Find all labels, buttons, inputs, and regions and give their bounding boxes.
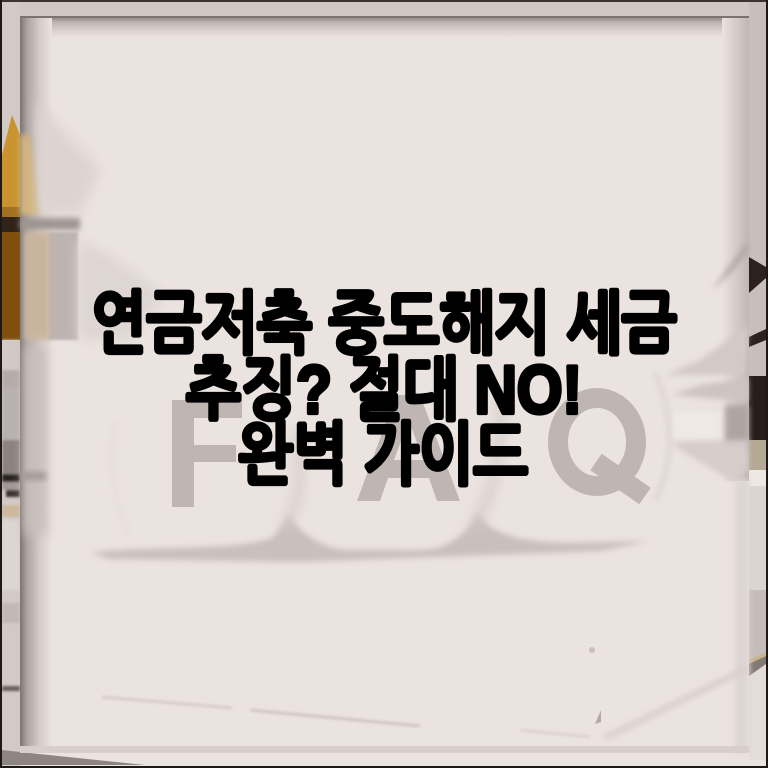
letter F [172,400,242,507]
right strip: dark object [749,257,766,676]
FAQ stones [90,372,669,562]
stone shadows [90,372,669,562]
blurred photo: background object at right [665,240,749,480]
letter A [357,395,460,501]
table line streaks [20,647,748,738]
left strip: yellow object [2,115,20,340]
blurred photo: background bottle at left [20,100,165,535]
bottom left dark wedge [2,750,145,765]
title line 3: 완벽 가이드 [238,417,528,493]
title line 2: 추징? 절대 NO! [186,352,582,428]
left strip: lower stripes [2,340,20,691]
title line 1: 연금저축 중도해지 세금 [91,286,677,362]
letter Q [558,398,645,496]
title [91,286,677,493]
